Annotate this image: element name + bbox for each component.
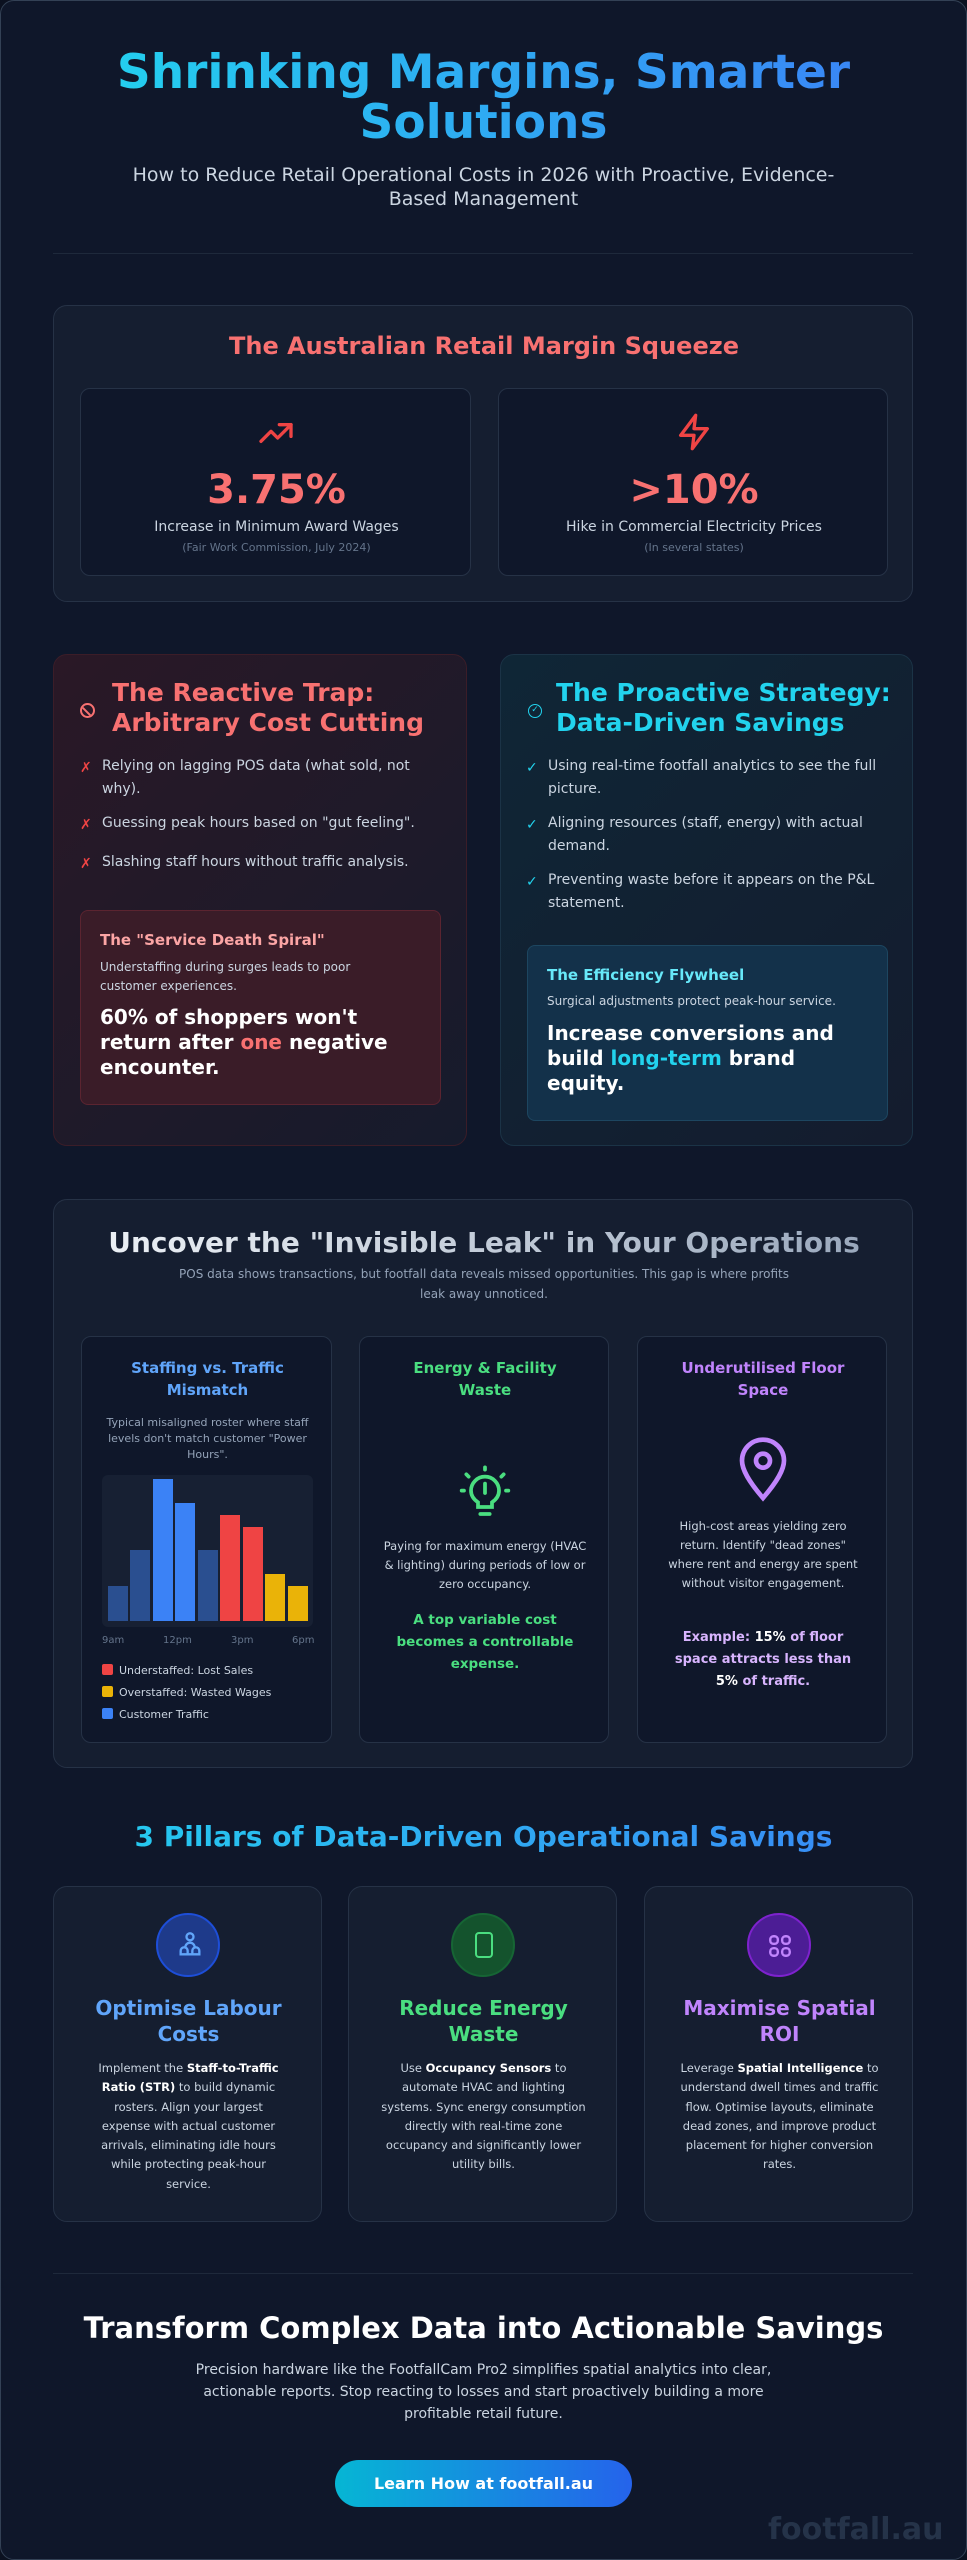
card: staffing mismatch: Typical misaligned roster where staff levels don't match customer "Power Hours".: [107, 1416, 308, 1461]
axis labels: 3pm: [231, 1635, 253, 1646]
panel: reactive trap: ✗: [80, 856, 92, 872]
list: Guessing peak hours based on "gut feeling".: [102, 815, 415, 831]
callout: flywheel: The Efficiency Flywheel: [547, 966, 744, 984]
list: [80, 758, 415, 872]
panel: reactive trap: ✗: [80, 817, 92, 833]
card: floor space: Example: 15% of floor space attracts less than 5% of traffic.: [675, 1630, 851, 1689]
stat number: 3.75%: [207, 467, 346, 513]
icon: lightning: [678, 414, 710, 450]
callout: flywheel: [527, 945, 888, 1121]
panel: invisible leak: [53, 1199, 913, 1768]
icon: users: [156, 1913, 220, 1977]
panel: reactive trap: ✗: [80, 760, 92, 776]
card: energy waste: Paying for maximum energy (HVAC & lighting) during periods of low or zero occupancy.: [384, 1539, 586, 1591]
card: energy waste: A top variable cost becomes a controllable expense.: [397, 1612, 573, 1672]
subtitle: POS data shows transactions, but footfall data reveals missed opportunities. This gap is where profits leak away unnoticed.: [179, 1267, 789, 1301]
icon: lightbulb: [460, 1466, 510, 1516]
pillar: energy: Reduce Energy Waste: [399, 1996, 568, 2046]
stat label: Hike in Commercial Electricity Prices: [566, 519, 822, 535]
cta heading: Transform Complex Data into Actionable Savings: [84, 2311, 883, 2345]
pillar: labour: [53, 1886, 322, 2222]
callout: death spiral: [80, 910, 441, 1105]
subtitle: How to Reduce Retail Operational Costs in 2026 with Proactive, Evidence-Based Management: [133, 164, 834, 210]
card: floor space: [637, 1336, 887, 1743]
stat label: Increase in Minimum Award Wages: [154, 519, 399, 535]
panel: margin squeeze: [53, 305, 913, 602]
card: energy waste: Energy & Facility Waste: [413, 1359, 557, 1399]
watermark: footfall.au: [768, 2512, 943, 2547]
heading: 3 pillars: 3 Pillars of Data-Driven Operational Savings: [135, 1820, 832, 1853]
callout: death spiral: 60% of shoppers won't return after one negative encounter.: [100, 1005, 388, 1079]
icon: tablet: [451, 1913, 515, 1977]
panel: proactive strategy: ✓: [526, 817, 538, 833]
callout: flywheel: Increase conversions and build long-term brand equity.: [547, 1021, 834, 1095]
pillar: labour: Implement the Staff-to-Traffic Ratio (STR) to build dynamic rosters. Align your largest expense with actual customer arrivals, eliminating idle hours while protecting peak-hour service.: [98, 2061, 279, 2191]
list: Aligning resources (staff, energy) with actual demand.: [548, 815, 863, 854]
list: Preventing waste before it appears on the P&L statement.: [548, 872, 874, 911]
axis labels: 12pm: [163, 1635, 192, 1646]
icon: no sign: [80, 703, 95, 718]
card: staffing mismatch: [81, 1336, 332, 1743]
axis labels: 6pm: [292, 1635, 314, 1646]
axis labels: [102, 1635, 314, 1646]
callout: flywheel: Surgical adjustments protect peak-hour service.: [547, 994, 836, 1008]
legend: Understaffed: Lost Sales: [119, 1664, 253, 1677]
list: [526, 758, 876, 911]
panel: reactive trap: [53, 654, 467, 1146]
source: (In several states): [644, 541, 744, 554]
pillar: energy: Use Occupancy Sensors to automate HVAC and lighting systems. Sync energy consumption directly with real-time zone occupancy and significantly lower utility bills.: [381, 2061, 586, 2171]
icon: map pin: [740, 1437, 786, 1502]
pillar: labour: Optimise Labour Costs: [95, 1996, 282, 2046]
icon: trending up: [259, 422, 293, 444]
panel: proactive strategy: [500, 654, 913, 1146]
cta text: Precision hardware like the FootfallCam Pro2 simplifies spatial analytics into clear, actionable reports. Stop reacting to losses and start proactively building a more profitable retail future.: [196, 2362, 771, 2422]
pillar: spatial: Maximise Spatial ROI: [683, 1996, 876, 2046]
pillar: spatial: [644, 1886, 913, 2222]
icon: grid: [747, 1913, 811, 1977]
legend: Customer Traffic: [119, 1708, 209, 1721]
panel: proactive strategy: ✓: [526, 874, 538, 890]
pillar: spatial: Leverage Spatial Intelligence to understand dwell times and traffic flow. Optimise layouts, eliminate dead zones, and improve product placement for higher conversion rates.: [680, 2061, 878, 2171]
card: energy waste: [359, 1336, 609, 1743]
cta button: Learn How at footfall.au: [374, 2474, 593, 2493]
legend: Overstaffed: Wasted Wages: [119, 1686, 271, 1699]
heading: Uncover the "Invisible Leak" in Your Operations: [108, 1226, 860, 1259]
list: Relying on lagging POS data (what sold, not why).: [102, 758, 410, 797]
callout: death spiral: Understaffing during surges leads to poor customer experiences.: [100, 960, 350, 993]
cta button: [335, 2460, 632, 2507]
list: Slashing staff hours without traffic analysis.: [102, 854, 409, 870]
heading: The Australian Retail Margin Squeeze: [229, 332, 739, 360]
icon: check circle: ✓: [531, 705, 539, 715]
heading: The Proactive Strategy: Data-Driven Savings: [556, 678, 891, 737]
heading: The Reactive Trap: Arbitrary Cost Cutting: [112, 678, 424, 737]
legend: [102, 1664, 271, 1721]
panel: proactive strategy: ✓: [526, 760, 538, 776]
source: (Fair Work Commission, July 2024): [182, 541, 371, 554]
stat number: >10%: [629, 467, 759, 513]
bar chart: [102, 1475, 313, 1627]
list: Using real-time footfall analytics to see the full picture.: [548, 758, 876, 797]
axis labels: 9am: [102, 1635, 124, 1646]
card: staffing mismatch: Staffing vs. Traffic Mismatch: [131, 1359, 284, 1399]
card: floor space: Underutilised Floor Space: [682, 1359, 844, 1399]
title: Shrinking Margins, Smarter Solutions: [117, 45, 850, 150]
stat card: wages: [80, 388, 471, 576]
pillar: energy: [348, 1886, 617, 2222]
card: floor space: High-cost areas yielding zero return. Identify "dead zones" where rent and energy are spent without visitor engagement.: [668, 1519, 858, 1590]
icon: check circle: [528, 704, 542, 718]
callout: death spiral: The "Service Death Spiral": [100, 931, 325, 949]
stat card: electricity: [498, 388, 888, 576]
